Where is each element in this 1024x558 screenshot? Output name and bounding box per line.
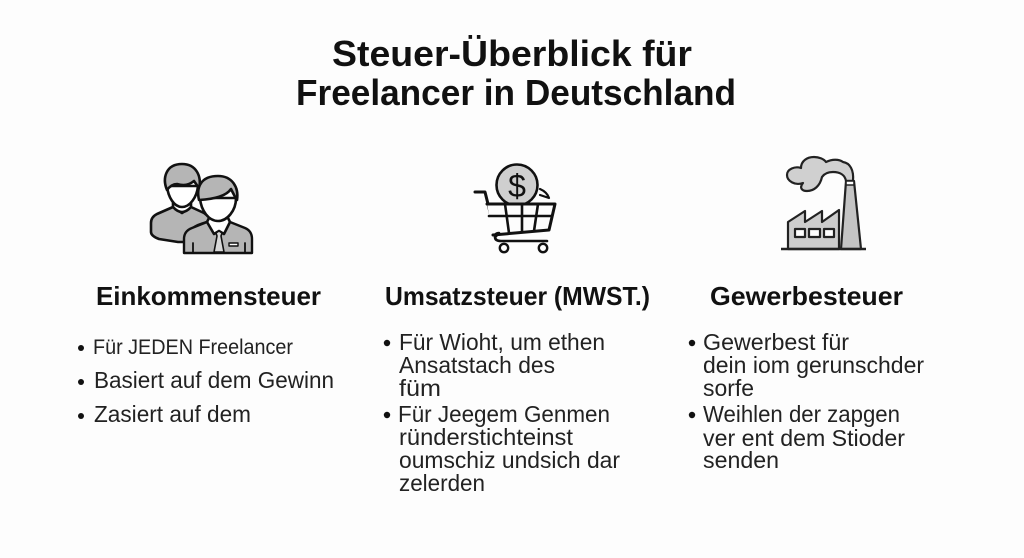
list: Einkommensteuer <box>78 336 334 427</box>
list: Einkommensteuer: Basiert auf dem Gewinn <box>94 367 334 393</box>
list: Einkommensteuer: Zasiert auf dem <box>94 401 251 427</box>
title: Freelancer in Deutschland <box>296 72 736 113</box>
icon: shopping cart with dollar coin <box>475 164 555 252</box>
list: Gewerbesteuer: Gewerbest für <box>703 329 849 355</box>
list: Umsatzsteuer <box>384 329 620 496</box>
list: Umsatzsteuer: Ansatstach des <box>399 352 555 378</box>
list: Umsatzsteuer: ründerstichteinst <box>399 424 574 450</box>
icon: factory with smoke <box>781 157 866 249</box>
icon: shopping cart with dollar coin: $ <box>508 168 526 204</box>
heading: Einkommensteuer: Einkommensteuer <box>96 281 321 311</box>
heading: Gewerbesteuer: Gewerbesteuer <box>710 281 903 311</box>
list: Gewerbesteuer: ver ent dem Stioder <box>703 425 905 451</box>
title <box>296 33 736 113</box>
list: Gewerbesteuer: Weihlen der zapgen <box>703 401 900 427</box>
list: Gewerbesteuer: senden <box>703 447 779 473</box>
list: Umsatzsteuer: zelerden <box>399 470 485 496</box>
list: Umsatzsteuer: Für Wioht, um ethen <box>399 329 605 355</box>
list: Einkommensteuer: Für JEDEN Freelancer <box>93 336 293 359</box>
title: Steuer-Überblick für <box>332 33 692 74</box>
list: Gewerbesteuer <box>689 329 924 473</box>
list: Umsatzsteuer: Für Jeegem Genmen <box>398 401 610 427</box>
list: Gewerbesteuer: dein iom gerunschder <box>703 352 924 378</box>
list: Umsatzsteuer: oumschiz undsich dar <box>399 447 620 473</box>
list: Umsatzsteuer: füm <box>399 375 441 401</box>
list: Gewerbesteuer: sorfe <box>703 375 754 401</box>
icon: two people <box>151 164 252 253</box>
heading: Umsatzsteuer: Umsatzsteuer (MWST.) <box>385 281 650 311</box>
